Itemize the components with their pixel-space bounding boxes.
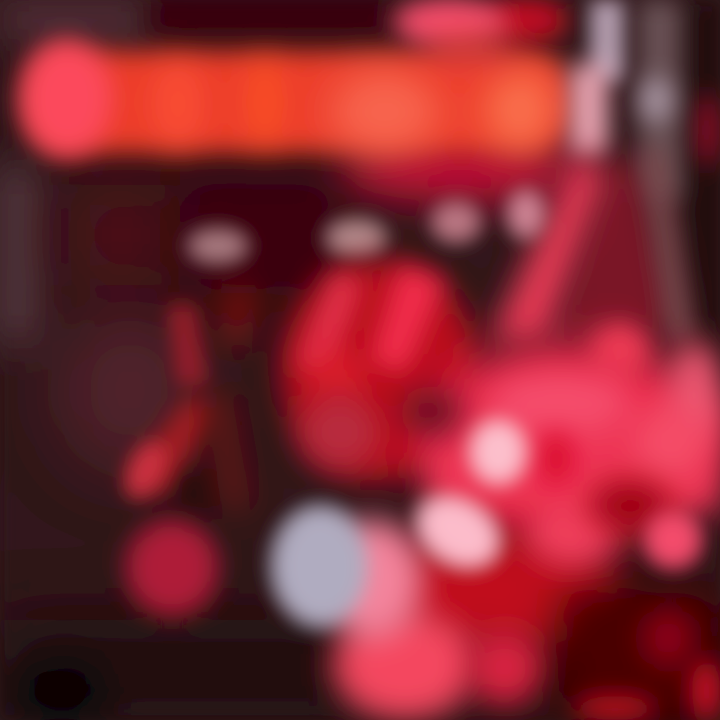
glow under banner	[340, 138, 580, 202]
hanging strip	[572, 0, 680, 200]
balloon cluster	[333, 322, 720, 720]
label chips	[188, 190, 544, 263]
banner: segment 2	[245, 58, 285, 146]
balloon highlight 1	[470, 420, 526, 484]
pink mass lower-left	[333, 610, 477, 720]
dark gap 1	[590, 481, 670, 529]
heart: right stripe	[370, 265, 445, 375]
heart: left stripe	[295, 270, 362, 375]
dark gap 3	[400, 386, 464, 438]
strip: grey knot	[641, 78, 671, 122]
dark lower-right	[560, 590, 720, 720]
top pink blob	[394, 0, 567, 66]
banner: left pink circle	[20, 40, 112, 156]
red lower mass	[380, 530, 620, 650]
chip 4	[508, 190, 544, 238]
chip 3	[432, 202, 480, 242]
chip 1	[188, 229, 248, 263]
grey circle	[272, 506, 422, 640]
triangle hanger	[490, 150, 695, 340]
banner: segment 1	[154, 60, 202, 148]
ribbon icon	[119, 285, 258, 516]
red circle	[126, 520, 218, 616]
dark gap 2	[538, 430, 574, 486]
heart: lower lobe	[300, 394, 380, 470]
banner: segment 4	[486, 68, 554, 152]
heart with ribbons	[282, 260, 478, 480]
top banner	[20, 40, 570, 156]
strip: grey band	[640, 0, 680, 200]
balloon deep	[644, 610, 692, 666]
chip 2	[326, 220, 386, 256]
balloon highlight 3	[645, 512, 701, 568]
heart: centre glow	[310, 351, 366, 399]
banner: segment 3	[330, 70, 440, 154]
balloon highlight 2	[404, 482, 512, 582]
